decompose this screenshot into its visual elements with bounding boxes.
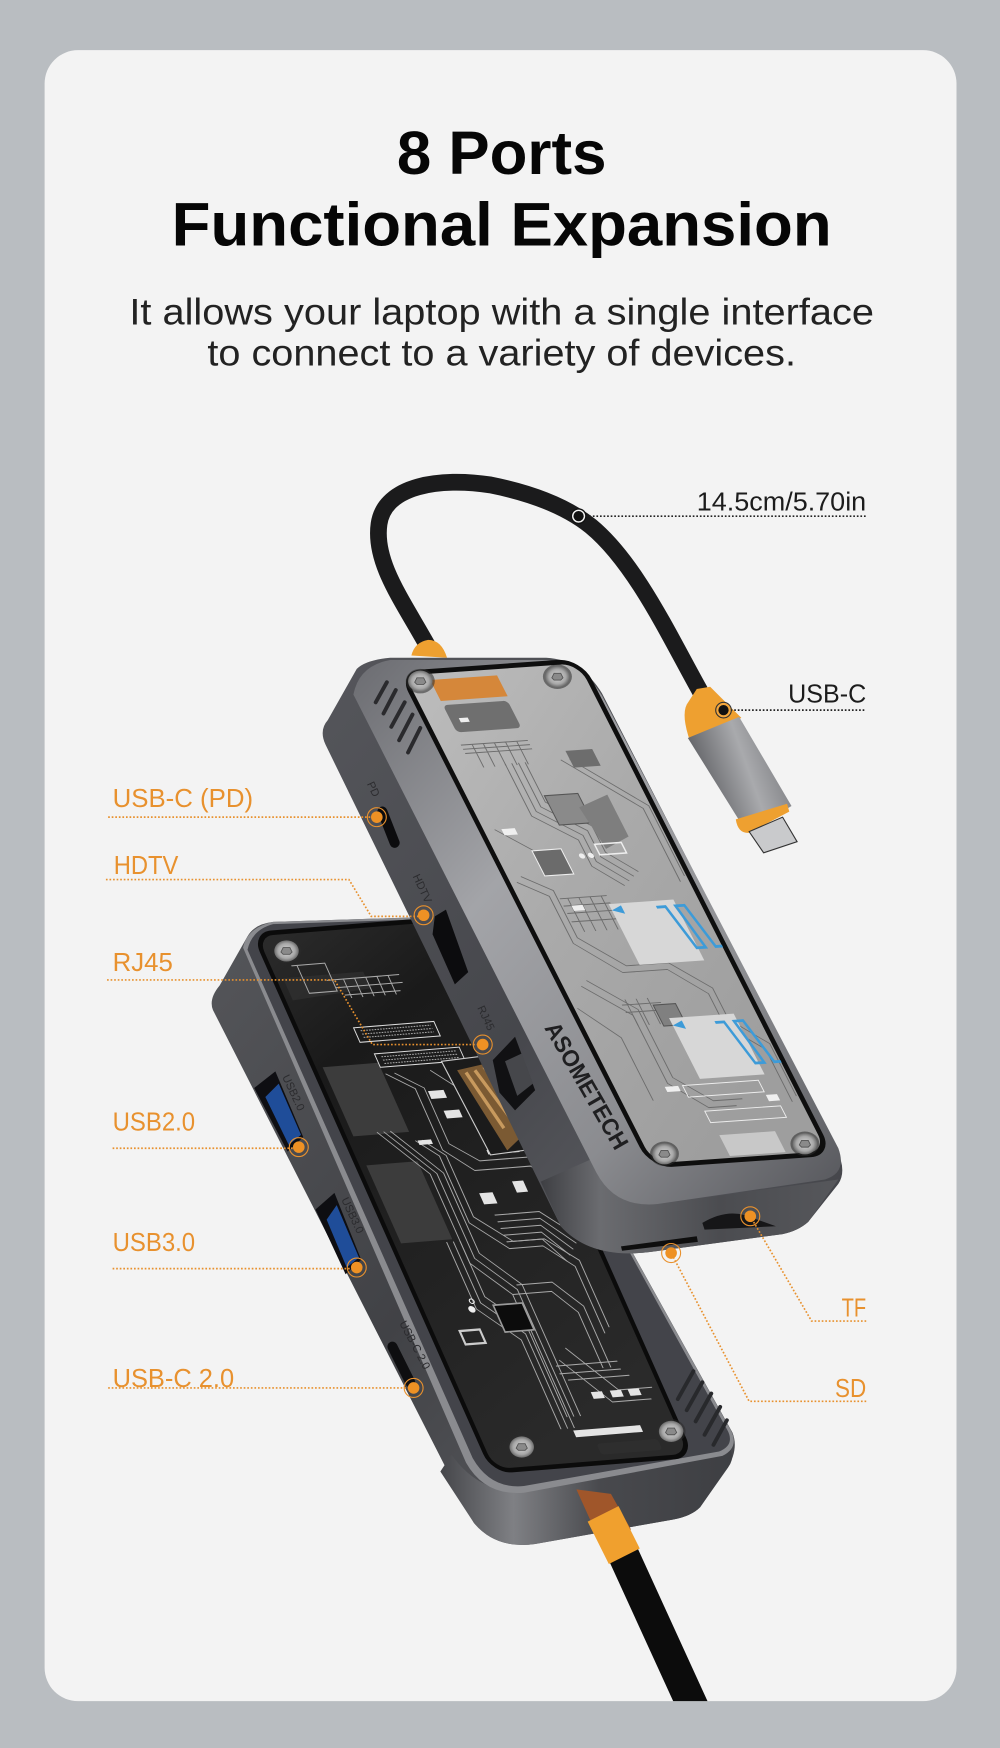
callout: USB2.0: USB2.0	[113, 1108, 195, 1136]
title: Functional Expansion	[172, 189, 832, 258]
port labels on upper hub: PD	[364, 780, 381, 799]
callout: SD	[662, 1244, 866, 1403]
upper hub bottom face	[541, 1159, 838, 1253]
port labels on lower hub: USB2.0	[279, 1073, 306, 1113]
subtitle: to connect to a variety of devices.	[207, 333, 796, 374]
brand: ASOMETECH: ASOMETECH	[540, 1017, 634, 1154]
product: lower dark hub	[212, 916, 735, 1545]
port: RJ45	[493, 1037, 535, 1110]
callout: HDTV: HDTV	[114, 852, 178, 880]
RJ45 copper contacts	[441, 1053, 555, 1155]
connector: USB-C plug	[685, 687, 797, 853]
port labels on lower hub: USB3.0	[338, 1196, 366, 1236]
upper hub glass with circuit	[401, 661, 830, 1166]
subtitle: It allows your laptop with a single interface	[129, 291, 874, 332]
callout: USB-C (PD)	[108, 785, 386, 827]
port: SD slot	[621, 1236, 698, 1251]
title: 8 Ports	[397, 118, 606, 187]
USB connector ghost 2	[669, 1012, 787, 1079]
port: USB 2.0	[254, 1071, 303, 1152]
callout: USB-C 2.0	[108, 1365, 423, 1397]
vents on lower hub	[678, 1371, 727, 1445]
port: USB-C 2.0	[392, 1347, 410, 1382]
callout: TF	[741, 1207, 866, 1323]
metal body	[688, 717, 792, 833]
callout: TF: TF	[842, 1295, 866, 1323]
callout: USB2.0	[113, 1108, 308, 1157]
port labels on upper hub: HDTV	[410, 872, 434, 905]
callout: USB-C (PD): USB-C (PD)	[113, 785, 253, 813]
screws on upper hub	[406, 664, 819, 1166]
sleeve	[685, 687, 741, 741]
callout: HDTV	[106, 852, 433, 925]
callout: USB3.0: USB3.0	[113, 1229, 195, 1257]
port labels on lower hub: USB-C 2.0	[396, 1319, 432, 1372]
cable: USB-C upper	[378, 482, 700, 691]
callout: USB-C 2.0: USB-C 2.0	[113, 1365, 234, 1393]
USB connector ghost 1	[609, 898, 729, 965]
upper hub side and bottom	[323, 658, 842, 1253]
lower hub body	[212, 916, 735, 1545]
port: HDTV	[433, 910, 468, 984]
subtitle	[129, 291, 874, 374]
callout: USB3.0	[113, 1229, 366, 1277]
callout: 14.5cm cable length	[571, 489, 866, 523]
callout: USB-C	[716, 680, 866, 718]
callout: SD: SD	[835, 1375, 866, 1403]
port labels on lower hub	[279, 1073, 432, 1372]
plug	[749, 817, 797, 853]
tip ring	[736, 804, 789, 833]
port labels on upper hub: RJ45	[474, 1004, 496, 1033]
title	[172, 118, 832, 258]
product: upper light hub	[323, 658, 842, 1253]
callout: RJ45: RJ45	[113, 949, 173, 977]
vents on upper hub	[376, 682, 420, 752]
port: USB-C PD	[382, 812, 395, 843]
callout: RJ45	[107, 949, 492, 1054]
callout: USB-C: USB-C	[788, 680, 866, 708]
port: USB 3.0	[316, 1193, 361, 1274]
screws on lower hub	[272, 939, 686, 1459]
cable sleeve: hub side	[411, 640, 447, 658]
lower hub glass with circuit	[254, 918, 692, 1472]
lower hub bottom face	[440, 1449, 732, 1545]
callout: 14.5cm cable length: 14.5cm/5.70in	[697, 489, 866, 517]
bottom cable of lower hub	[576, 1489, 693, 1708]
lower hub top frame	[243, 916, 734, 1493]
port labels on upper hub	[364, 780, 496, 1033]
upper hub top frame	[353, 660, 841, 1204]
port: TF slot	[702, 1213, 776, 1230]
